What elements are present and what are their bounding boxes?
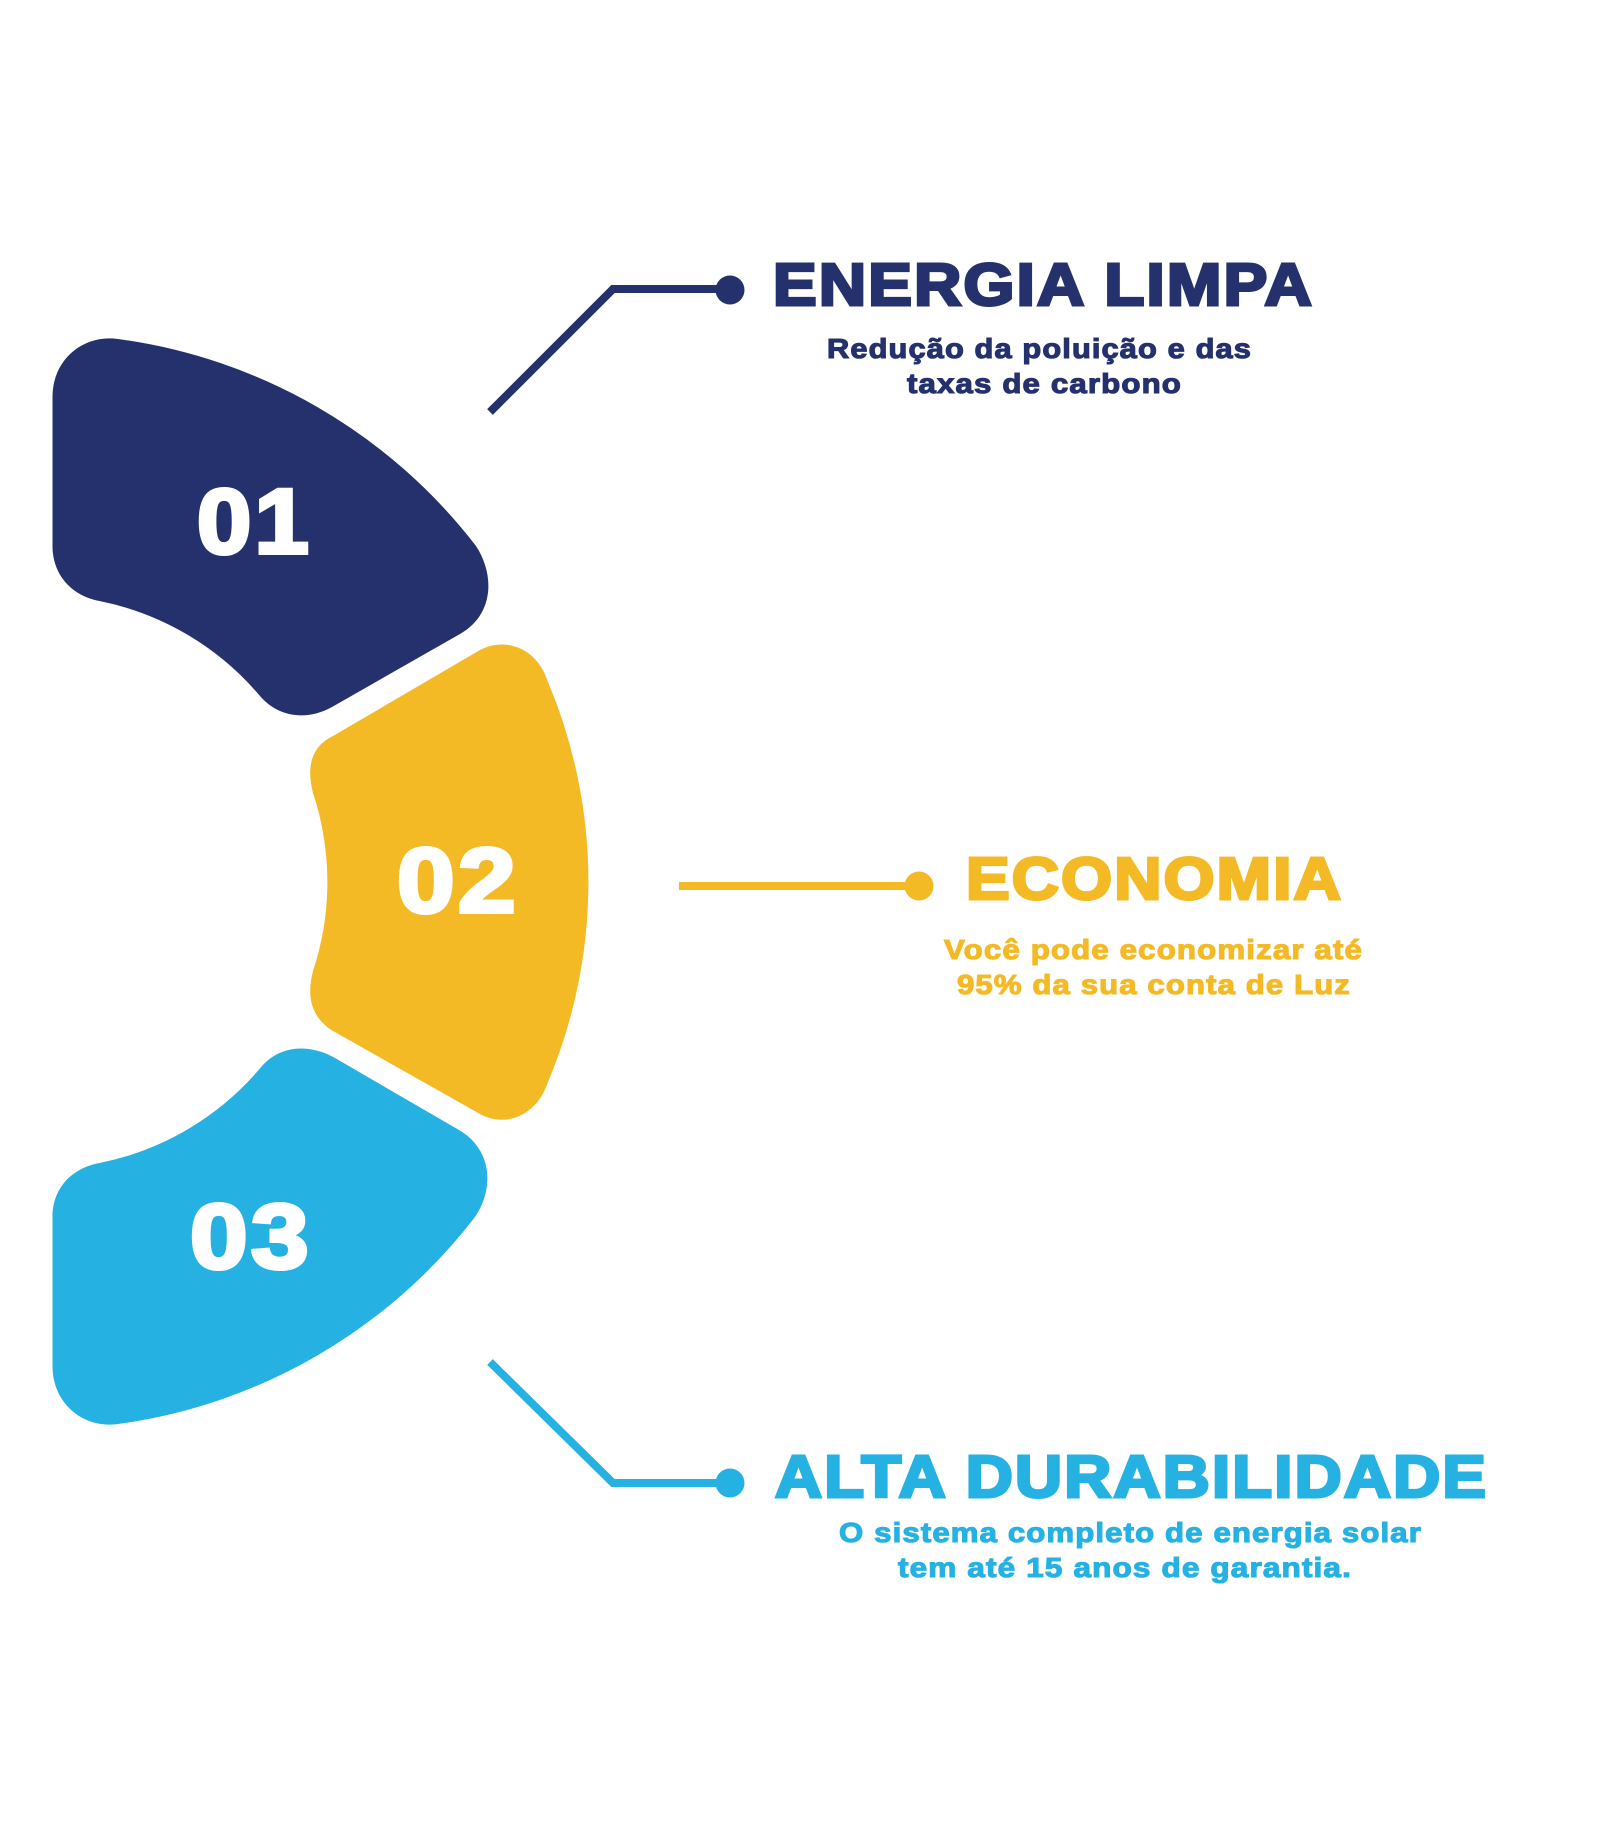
number 02: 02: [397, 830, 519, 932]
number 03: 03: [190, 1186, 312, 1288]
segment 02: yellow arc block: [310, 645, 588, 1120]
text block: alta durabilidade description: tem até 15 anos de garantia.: [898, 1552, 1352, 1583]
text block: economia description: [944, 934, 1363, 1000]
connector line 03 with dot: [490, 1362, 744, 1498]
heading: ECONOMIA: ECONOMIA: [966, 846, 1343, 912]
text block: energia limpa description: taxas de carbono: [907, 368, 1182, 399]
connector line 01 with dot: [490, 276, 744, 412]
text block: energia limpa description: Redução da poluição e das: [827, 333, 1252, 364]
text block: economia description: 95% da sua conta de Luz: [957, 969, 1351, 1000]
segment 03: blue arc block: [52, 1049, 487, 1425]
number 01: 01: [197, 471, 312, 573]
connector line 02 with dot: [679, 872, 934, 900]
heading: ENERGIA LIMPA: ENERGIA LIMPA: [773, 252, 1314, 318]
text block: alta durabilidade description: O sistema completo de energia solar: [839, 1517, 1422, 1548]
heading: ALTA DURABILIDADE: ALTA DURABILIDADE: [775, 1444, 1488, 1510]
text block: alta durabilidade description: [839, 1517, 1422, 1583]
text block: economia description: Você pode economizar até: [944, 934, 1363, 965]
text block: energia limpa description: [827, 333, 1252, 399]
segment 01: navy arc block: [52, 338, 488, 715]
